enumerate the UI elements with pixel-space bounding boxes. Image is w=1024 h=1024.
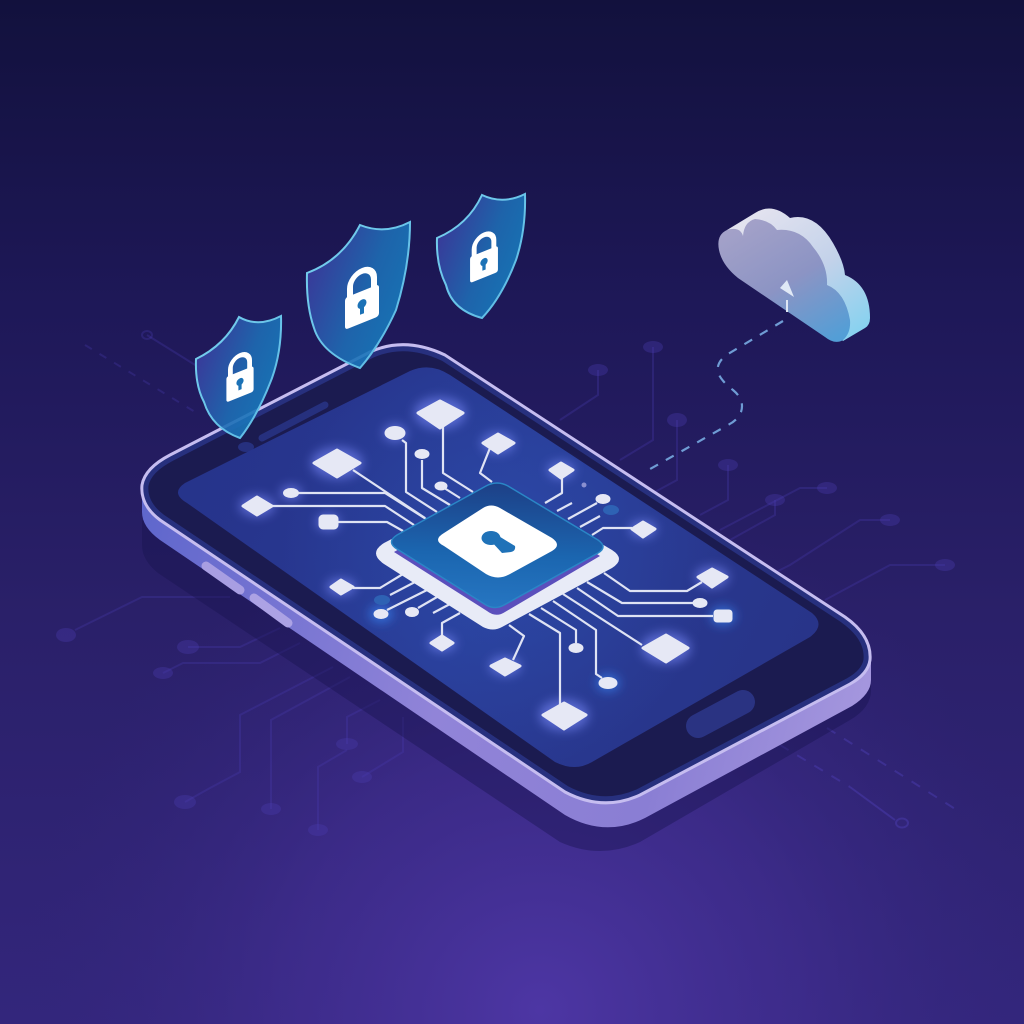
- phone top surface: [142, 345, 870, 803]
- chip purple edge: [394, 490, 600, 615]
- phone shadow: [142, 520, 871, 851]
- phone side wall: [142, 485, 871, 827]
- padlock icon: [345, 264, 379, 330]
- cloud extruded side: [727, 209, 870, 341]
- screen: [178, 367, 819, 767]
- shield: right: [437, 194, 525, 318]
- chip top face: [392, 483, 603, 608]
- upload dashed link: [786, 300, 788, 312]
- side button lower: [254, 598, 288, 623]
- shield: left: [196, 316, 281, 438]
- padlock plate: [438, 506, 557, 578]
- keyhole: [482, 531, 515, 553]
- phone rim highlight: [142, 345, 870, 803]
- phone: [142, 345, 871, 827]
- circuit nodes: [243, 401, 731, 729]
- padlock icon: [226, 350, 254, 402]
- padlock icon: [470, 229, 498, 283]
- upload arrow head: [780, 280, 794, 297]
- cloud front face: [718, 219, 850, 342]
- home button: [698, 702, 743, 726]
- circuit glow: [239, 397, 736, 731]
- cloud: [718, 209, 870, 342]
- shield: middle: [307, 222, 410, 368]
- chip white base: [376, 486, 619, 630]
- camera dot: [238, 442, 254, 452]
- dim circuit dots: [374, 482, 619, 605]
- central chip: [376, 483, 619, 630]
- dashed connection to cloud: [643, 321, 783, 473]
- circuit traces: [268, 427, 713, 705]
- side button upper: [206, 566, 240, 590]
- background circuit traces: [56, 331, 960, 836]
- phone inner bezel ring: [142, 345, 870, 803]
- speaker slot: [262, 405, 325, 438]
